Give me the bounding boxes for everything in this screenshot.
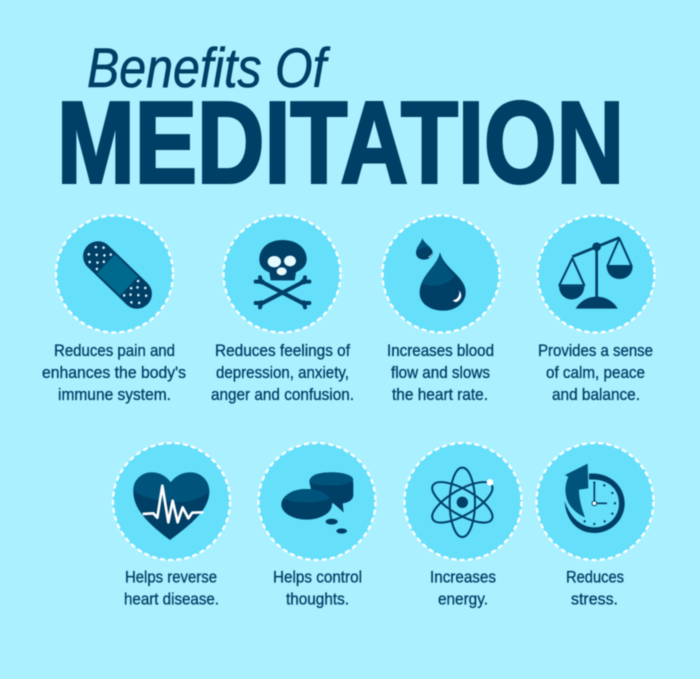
caption xyxy=(566,568,624,608)
title xyxy=(57,36,624,208)
title line: Benefits Of: Benefits Of xyxy=(87,36,331,99)
caption xyxy=(124,568,219,608)
caption: Reduces xyxy=(566,568,624,586)
panel: control thoughts xyxy=(258,443,376,608)
caption xyxy=(42,342,186,404)
icon: heart with pulse xyxy=(133,472,209,540)
caption: Reduces pain and xyxy=(54,342,175,360)
caption: Increases blood xyxy=(387,342,494,360)
caption: thoughts. xyxy=(286,590,349,608)
caption xyxy=(430,568,496,608)
caption xyxy=(538,342,653,404)
panel: depression and anxiety xyxy=(211,216,354,404)
caption: enhances the body's xyxy=(42,364,186,382)
circle badge xyxy=(224,216,340,332)
icon: atom xyxy=(427,468,498,537)
icon: thought bubbles xyxy=(281,472,353,534)
circle badge xyxy=(113,443,230,560)
caption xyxy=(387,342,494,404)
icon: bandage xyxy=(77,235,158,315)
icon: clock with arrow xyxy=(565,464,625,533)
panel: energy xyxy=(404,443,522,608)
icon: skull and crossbones xyxy=(256,240,309,307)
caption: depression, anxiety, xyxy=(216,364,349,382)
icon: water drops xyxy=(416,238,466,311)
panel: blood flow xyxy=(382,216,500,404)
circle badge xyxy=(382,216,500,332)
panel: calm and balance xyxy=(538,216,654,404)
caption: and balance. xyxy=(552,386,640,404)
circle badge xyxy=(538,216,654,332)
caption xyxy=(273,568,362,608)
caption: energy. xyxy=(438,590,488,608)
panel: pain and immune system xyxy=(42,216,186,404)
circle badge xyxy=(404,443,522,560)
caption: Provides a sense xyxy=(538,342,653,360)
caption: flow and slows xyxy=(391,364,490,382)
circle badge xyxy=(536,443,654,560)
icon: balance scales xyxy=(559,238,633,309)
caption: Helps control xyxy=(273,568,362,586)
caption: stress. xyxy=(571,590,618,608)
panel: stress xyxy=(536,443,654,608)
caption: Reduces feelings of xyxy=(215,342,350,360)
circle badge xyxy=(258,443,376,560)
caption: anger and confusion. xyxy=(211,386,354,404)
caption: heart disease. xyxy=(124,590,219,608)
caption: Increases xyxy=(430,568,496,586)
caption: Helps reverse xyxy=(125,568,217,586)
panel: heart disease xyxy=(113,443,230,608)
circle badge xyxy=(56,216,173,332)
caption: of calm, peace xyxy=(546,364,645,382)
caption: immune system. xyxy=(58,386,171,404)
caption: the heart rate. xyxy=(392,386,488,404)
caption xyxy=(211,342,354,404)
